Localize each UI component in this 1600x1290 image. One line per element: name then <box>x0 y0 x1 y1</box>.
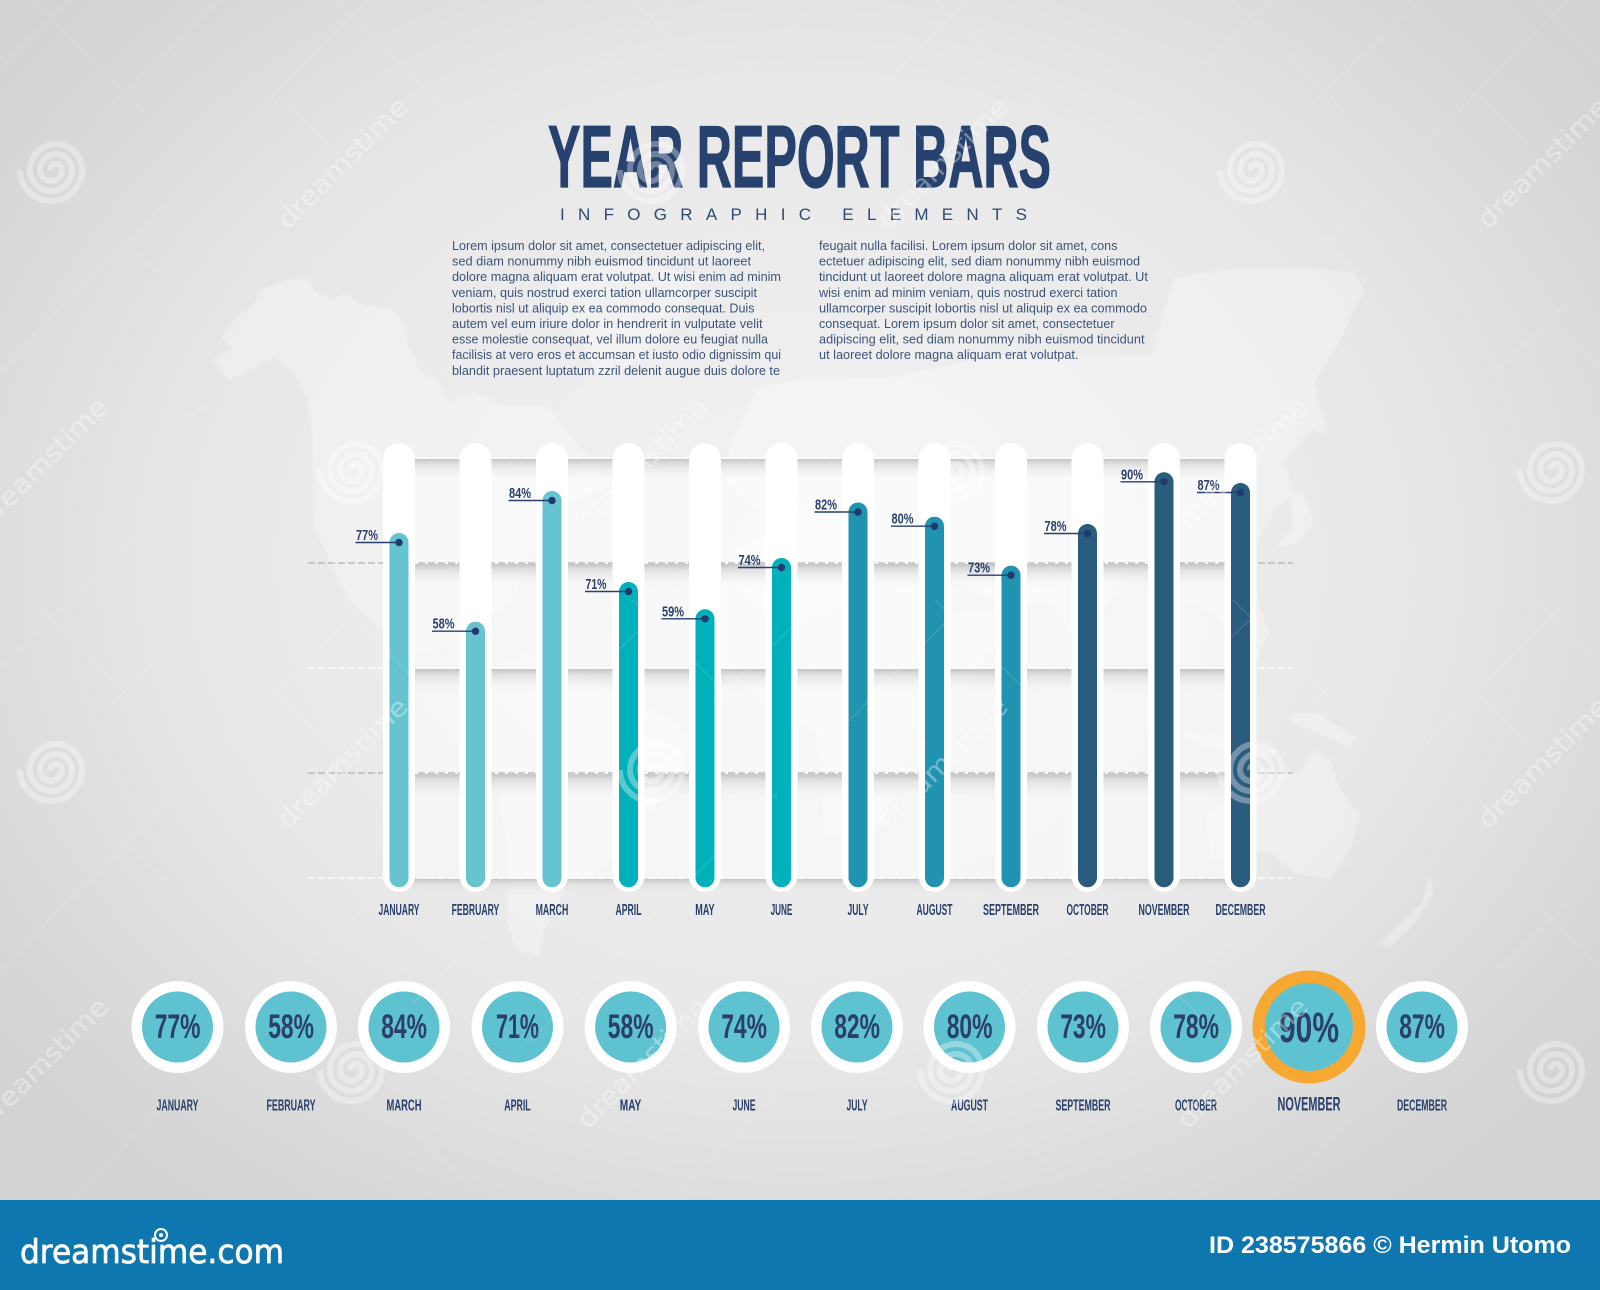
column: April: 71% <box>586 576 606 593</box>
map: Indonesia <box>1181 714 1356 757</box>
column: October: OCTOBER <box>1066 902 1108 919</box>
column: July: 82% <box>815 496 837 514</box>
column: May: MAY <box>695 902 715 919</box>
column: October: 78% <box>1044 518 1066 535</box>
text block: left column: dolore magna aliquam erat volutpat. Ut wisi enim ad minim <box>452 269 781 284</box>
column: August: AUGUST <box>916 902 953 919</box>
column: May <box>662 443 721 919</box>
watermark overlay: dreamstime <box>272 692 415 835</box>
subtitle: INFOGRAPHIC ELEMENTS <box>560 205 1027 224</box>
donut: May: 58% <box>608 1008 654 1046</box>
map: Greenland <box>555 262 700 380</box>
footer logo: dreamstime.com <box>20 1232 284 1271</box>
donut: February: FEBRUARY <box>266 1098 316 1115</box>
donut: October <box>1150 981 1242 1115</box>
column: February <box>432 443 500 919</box>
donut: December <box>1376 981 1468 1115</box>
map: North America <box>175 278 614 654</box>
donut: December: 87% <box>1399 1008 1445 1046</box>
donut: June: 74% <box>721 1008 767 1046</box>
donut row <box>132 970 1468 1116</box>
watermark overlay: dreamstime <box>572 392 715 535</box>
column: June <box>738 443 798 919</box>
column: April <box>585 443 644 919</box>
text block: left column: Lorem ipsum dolor sit amet, consectetuer adipiscing elit, <box>452 238 765 253</box>
column: November: NOVEMBER <box>1138 902 1190 919</box>
column: January: 77% <box>356 527 378 544</box>
text block: right column: ectetuer adipiscing elit, sed diam nonummy nibh euismod <box>819 254 1140 269</box>
text block: right column: tincidunt ut laoreet dolore magna aliquam erat volutpat. Ut <box>819 269 1148 284</box>
column: August <box>891 443 953 919</box>
column: July <box>814 443 874 919</box>
donut: July: JULY <box>846 1098 868 1115</box>
column: December <box>1197 443 1266 919</box>
column: February: FEBRUARY <box>452 902 500 919</box>
watermark overlay: dreamstime <box>1172 992 1315 1135</box>
column: December: 87% <box>1198 477 1220 494</box>
donut: June <box>698 981 790 1115</box>
map: South America <box>478 654 689 957</box>
watermark overlay: dreamstime <box>272 92 415 235</box>
watermark overlay: dreamstime <box>872 692 1015 835</box>
column: June: JUNE <box>771 902 792 919</box>
donut: May <box>585 981 677 1115</box>
donut: May: MAY <box>620 1098 642 1115</box>
map: Africa <box>700 512 1016 847</box>
column: March: 84% <box>509 485 531 502</box>
text block: left column: facilisis at vero eros et accumsan et iusto odio dignissim qui <box>452 347 781 362</box>
donut: March: 84% <box>381 1008 427 1046</box>
title: YEAR REPORT BARS <box>548 107 1051 206</box>
text block: right column: wisi enim ad minim veniam, quis nostrud exerci tation <box>818 285 1118 300</box>
text block: left column: autem vel eum iriure dolor in hendrerit in vulputate velit <box>452 316 763 331</box>
text block: left column: lobortis nisl ut aliquip ex ea commodo consequat. Duis <box>452 300 755 315</box>
donut: March: MARCH <box>386 1098 422 1115</box>
donut: December: DECEMBER <box>1397 1098 1447 1115</box>
donut: August: 80% <box>947 1008 992 1046</box>
map: Australia <box>1206 751 1360 879</box>
donut: July <box>811 981 903 1115</box>
donut: October: OCTOBER <box>1175 1098 1217 1115</box>
watermark overlay: dreamstime <box>872 92 1015 235</box>
text block: right column: consequat. Lorem ipsum dolor sit amet, consectetuer <box>819 316 1115 331</box>
donut: November highlighted: 90% <box>1279 1004 1339 1052</box>
map: Japan <box>1277 489 1314 548</box>
watermark overlay: dreamstime <box>1172 392 1315 535</box>
column: January <box>356 443 420 919</box>
donut: January: JANUARY <box>156 1098 199 1115</box>
text block: right column: adipiscing elit, sed diam nonummy nibh euismod tincidunt <box>819 332 1145 347</box>
donut: September: SEPTEMBER <box>1056 1098 1110 1115</box>
column: September: 73% <box>968 560 990 577</box>
donut: August <box>924 981 1016 1115</box>
donut: September: 73% <box>1060 1008 1106 1046</box>
column: December: DECEMBER <box>1216 902 1266 919</box>
text block: left column: veniam, quis nostrud exerci tation ullamcorper suscipit <box>452 285 757 300</box>
map: Eurasia <box>725 268 1364 663</box>
bar chart <box>356 443 1266 919</box>
text block: left column: sed diam nonummy nibh euismod tincidunt ut laoreet <box>452 254 751 269</box>
donut: April: APRIL <box>504 1098 531 1115</box>
watermark overlay: dreamstime <box>1472 692 1600 835</box>
column: July: JULY <box>848 902 869 919</box>
footer band <box>0 1200 1600 1290</box>
watermark overlay: dreamstime <box>1472 92 1600 235</box>
donut: June: JUNE <box>732 1098 756 1115</box>
donut: February <box>245 981 337 1115</box>
column: March: MARCH <box>536 902 568 919</box>
donut: January: 77% <box>155 1008 200 1046</box>
donut: March <box>358 981 450 1115</box>
column: May: 59% <box>662 603 684 620</box>
donut: July: 82% <box>834 1008 880 1046</box>
column: October <box>1044 443 1108 919</box>
column: November: 90% <box>1121 466 1143 483</box>
column: January: JANUARY <box>378 902 420 919</box>
donut: April: 71% <box>496 1008 539 1046</box>
text block: right column: ut laoreet dolore magna aliquam erat volutpat. <box>819 347 1078 362</box>
column: April: APRIL <box>616 902 642 919</box>
footer credit: ID 238575866 © Hermin Utomo <box>1209 1232 1571 1259</box>
text block: right column <box>818 238 1148 362</box>
column: March <box>508 443 568 919</box>
watermark overlay: dreamstime <box>572 992 715 1135</box>
text block: right column: ullamcorper suscipit lobortis nisl ut aliquip ex ea commodo <box>819 300 1147 315</box>
text block: left column <box>452 238 781 378</box>
column: September <box>968 443 1039 919</box>
column: September: SEPTEMBER <box>983 902 1039 919</box>
text block: left column: esse molestie consequat, vel illum dolore eu feugiat nulla <box>452 332 769 347</box>
column: November <box>1120 443 1190 919</box>
column: August: 80% <box>892 511 914 528</box>
donut: February: 58% <box>268 1008 314 1046</box>
donut: September <box>1037 981 1129 1115</box>
donut: October: 78% <box>1173 1008 1219 1046</box>
world map <box>175 262 1434 957</box>
donut: November highlighted <box>1252 970 1366 1116</box>
donut: November highlighted: NOVEMBER <box>1278 1094 1340 1116</box>
map: New Zealand <box>1380 875 1434 948</box>
donut: January <box>132 981 224 1115</box>
text block: left column: blandit praesent luptatum zzril delenit augue duis dolore te <box>452 363 780 378</box>
column: February: 58% <box>432 616 454 633</box>
donut: April <box>472 981 564 1115</box>
chart backdrop: shelves and gridlines <box>308 458 1293 895</box>
donut: August: AUGUST <box>951 1098 988 1115</box>
column: June: 74% <box>738 552 760 569</box>
text block: right column: feugait nulla facilisi. Lorem ipsum dolor sit amet, cons <box>819 238 1118 253</box>
